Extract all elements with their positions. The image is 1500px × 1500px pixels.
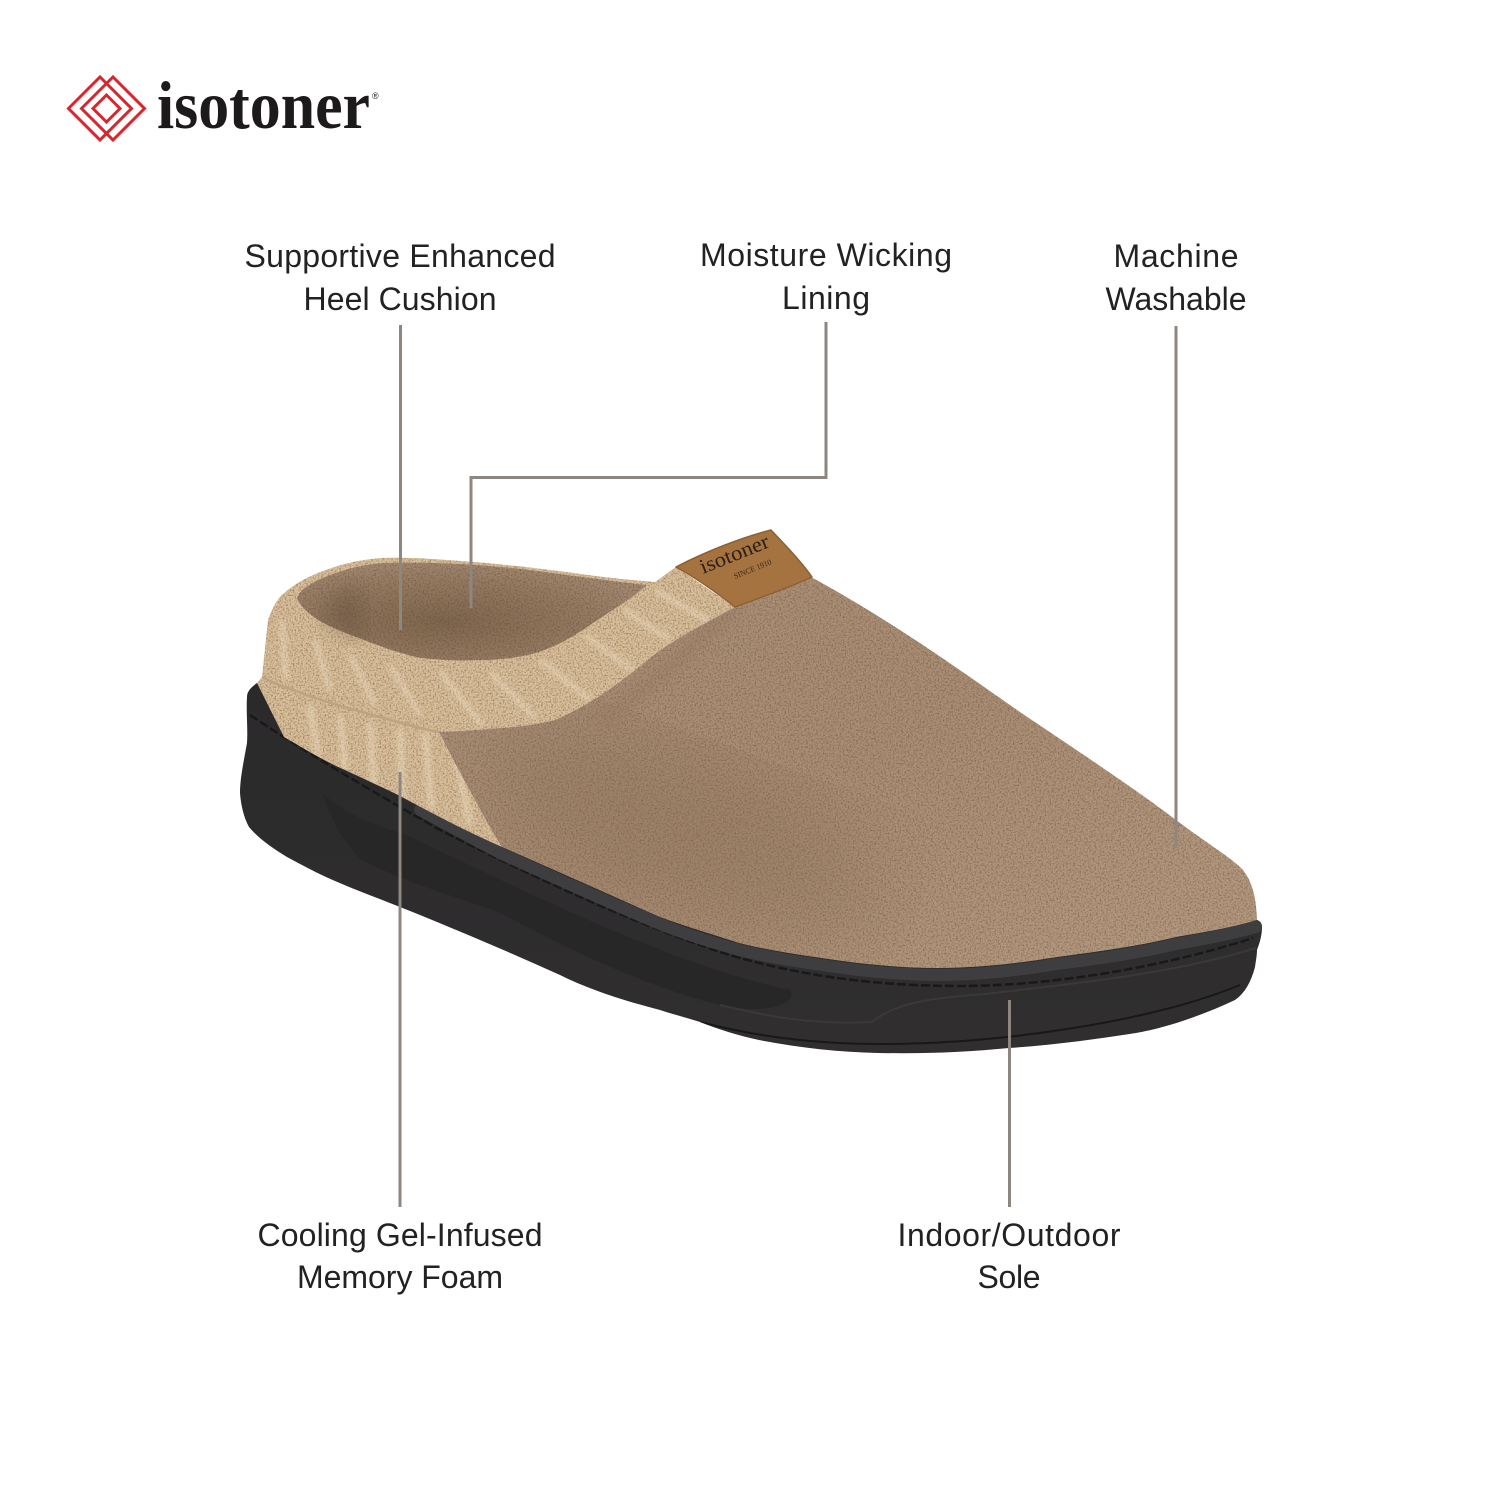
leader line: memory foam (398, 772, 402, 1207)
sole (240, 683, 1262, 1053)
brand tab (676, 529, 812, 607)
leader line: machine washable (1174, 326, 1178, 848)
label: cooling memory foam: Cooling Gel-Infused (258, 1217, 542, 1253)
sole welt band (420, 810, 1256, 975)
logo mark: red diamonds (68, 77, 144, 140)
label: machine washable: Machine (1114, 238, 1238, 274)
lining shadow (322, 582, 366, 640)
label: moisture wicking lining: Moisture Wicking (700, 237, 952, 273)
collar ribs (282, 590, 710, 825)
logo wordmark: isotoner (157, 67, 370, 143)
leader line: sole (1008, 1000, 1011, 1207)
slipper upper (439, 577, 1257, 968)
label: supportive heel cushion: Supportive Enhanced (244, 238, 556, 274)
leader line: lining (471, 322, 826, 608)
tab wordmark: isotoner (696, 529, 773, 579)
upper shading (506, 613, 854, 927)
logo (68, 67, 379, 143)
collar seam (262, 677, 439, 732)
slipper product image (240, 529, 1262, 1053)
label: cooling memory foam: Memory Foam (297, 1259, 503, 1295)
leader line: heel cushion (399, 325, 402, 630)
label: indoor outdoor sole: Indoor/Outdoor (898, 1217, 1121, 1253)
label: supportive heel cushion: Heel Cushion (304, 281, 496, 317)
label: indoor outdoor sole: Sole (978, 1259, 1040, 1295)
lining interior (297, 563, 647, 660)
fabric heel collar (257, 558, 735, 847)
label: machine washable: Washable (1106, 281, 1246, 317)
tab sub text: SINCE 1910 (732, 558, 773, 581)
label: moisture wicking lining: Lining (782, 280, 870, 316)
sole side panel and grooves (250, 715, 1256, 1044)
logo registered mark: ® (372, 91, 379, 101)
